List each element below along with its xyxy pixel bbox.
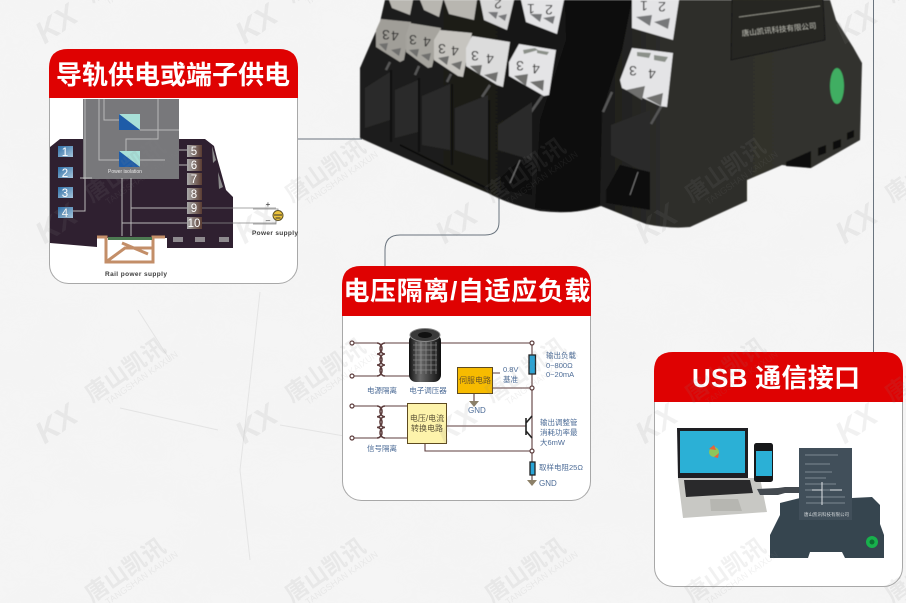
circuit labels: 输出调整管 [540, 417, 578, 427]
circuit labels: 基准 [503, 374, 518, 384]
circuit labels [367, 350, 583, 488]
lower terminal blocks 3/4: 3 [382, 27, 390, 43]
terminal numbers right: 7 [191, 174, 197, 186]
watermarks: 唐山凯讯 [480, 333, 570, 407]
servo box [458, 368, 492, 394]
transistor [526, 416, 532, 438]
lower terminal blocks 3/4: 3 [629, 63, 637, 79]
resistors [529, 355, 536, 374]
terminal numbers right: 9 [191, 203, 197, 215]
terminal numbers left [58, 146, 73, 220]
terminal numbers left: 1 [62, 147, 68, 159]
watermarks: KX [629, 196, 686, 251]
lower terminal blocks 3/4 [376, 19, 673, 107]
laptop [677, 428, 767, 518]
panel: USB interface [654, 352, 903, 586]
watermarks: KX [429, 396, 486, 451]
lower terminal blocks 3/4: 3 [471, 48, 479, 64]
terminal numbers left: 3 [62, 188, 68, 200]
watermarks: 唐山凯讯 [280, 133, 370, 207]
watermarks: KX [429, 196, 486, 251]
heading: USB 通信接口 [692, 363, 860, 393]
front sockets [365, 72, 650, 175]
circuit labels: 大6mW [540, 437, 566, 447]
polarity marks: + [266, 200, 271, 209]
terminal numbers right: 6 [191, 160, 197, 172]
watermarks: 唐山凯讯 [280, 333, 370, 407]
product photo: isolators [360, 0, 862, 228]
black gap between devices [535, 0, 632, 212]
watermarks: KX [829, 396, 886, 451]
terminal numbers right: 10 [188, 218, 200, 230]
lower terminal blocks 3/4: 3 [438, 41, 446, 57]
panel: rail or terminal power [49, 49, 298, 284]
connector lines [298, 0, 874, 352]
circuit labels: 电源隔离 [367, 385, 397, 395]
watermarks: TANGSHAN KAIXUN [304, 349, 380, 407]
watermarks: 唐山凯讯 [680, 333, 770, 407]
watermarks: 唐山凯讯 [80, 133, 170, 207]
ground symbol [273, 210, 283, 220]
lower terminal blocks 3/4: 3 [516, 58, 524, 74]
ground symbols [469, 401, 537, 486]
DIN rail [97, 237, 165, 262]
isolator module [770, 448, 884, 558]
circuit diagram: 电压/电流 [410, 413, 444, 423]
isolation box [83, 99, 179, 179]
watermarks: TANGSHAN KAIXUN [104, 349, 180, 407]
plate text: 唐山凯讯科技有限公司 [741, 20, 817, 38]
upper terminal blocks 1/2: 2 [545, 2, 553, 18]
rail slots [786, 130, 854, 168]
wiring diagram [50, 99, 298, 278]
device group silhouette [360, 0, 862, 228]
green status dot [830, 68, 844, 104]
watermarks: KX [829, 196, 886, 251]
circuit diagram [350, 328, 583, 488]
transformer coils [377, 343, 385, 438]
heading: 导轨供电或端子供电 [56, 60, 290, 90]
module maker text: 唐山凯讯科技有限公司 [804, 511, 849, 518]
terminal numbers right: 5 [191, 146, 197, 158]
circuit labels: 输出负载 [546, 350, 576, 360]
terminal numbers right: 8 [191, 189, 197, 201]
circuit labels: 消耗功率最 [540, 427, 578, 437]
circuit diagram: 转换电路 [411, 423, 443, 433]
watermarks: KX [629, 396, 686, 451]
rail power label: Rail power supply [105, 271, 167, 278]
watermarks: TANGSHAN KAIXUN [504, 149, 580, 207]
circuit labels: GND [468, 406, 486, 415]
terminal numbers left: 4 [62, 208, 69, 220]
power supply label: Power supply [252, 230, 298, 237]
diagram caption: Power isolation [108, 169, 142, 175]
watermarks: TANGSHAN KAIXUN [704, 349, 780, 407]
watermarks: KX [29, 396, 86, 451]
circuit labels: GND [539, 479, 557, 488]
heading: 电压隔离/自适应负载 [344, 276, 590, 306]
header [654, 352, 903, 402]
header [342, 266, 591, 316]
module body [50, 139, 233, 248]
terminal numbers right [187, 145, 202, 230]
lower terminal blocks 3/4: 4 [423, 34, 431, 50]
watermarks: 唐山凯讯 [680, 133, 770, 207]
header [49, 49, 298, 98]
circuit labels: 0~800Ω [546, 361, 573, 370]
lower terminal blocks 3/4: 4 [532, 61, 540, 77]
lower terminal blocks 3/4: 3 [409, 32, 417, 48]
module separators [391, 70, 490, 193]
circuit labels: 电子调压器 [409, 385, 447, 395]
watermarks: TANGSHAN KAIXUN [704, 149, 780, 207]
watermarks: 唐山凯讯 [80, 333, 170, 407]
isolation symbols [119, 114, 140, 130]
circuit labels: 0.8V [503, 365, 518, 374]
terminals [350, 341, 534, 453]
power supply wires [202, 208, 278, 224]
watermarks: KX [229, 196, 286, 251]
lower terminal blocks 3/4: 4 [648, 66, 656, 82]
wiring diagram: – [266, 216, 271, 225]
terminal numbers left: 2 [62, 168, 68, 180]
lower terminal blocks 3/4: 4 [486, 51, 494, 67]
conversion box [408, 404, 446, 444]
panel: voltage isolation [342, 266, 591, 500]
voltage regulator cylinder [409, 334, 441, 382]
upper terminal blocks 1/2 [389, 0, 679, 40]
smartphone [754, 443, 773, 482]
watermarks: TANGSHAN KAIXUN [304, 149, 380, 207]
circuit labels: 取样电阻25Ω [539, 462, 583, 472]
watermarks: TANGSHAN KAIXUN [504, 349, 580, 407]
watermarks: KX [229, 396, 286, 451]
circuit diagram: 伺服电路 [459, 375, 491, 385]
watermarks: 唐山凯讯 [480, 133, 570, 207]
watermarks: KX [29, 196, 86, 251]
USB cable [757, 487, 800, 495]
label plate [731, 0, 825, 60]
watermarks: TANGSHAN KAIXUN [104, 149, 180, 207]
circuit labels: 信号隔离 [367, 443, 397, 453]
circuit labels: 0~20mA [546, 370, 574, 379]
lower terminal blocks 3/4: 4 [451, 43, 459, 59]
lower terminal blocks 3/4: 4 [391, 28, 399, 44]
upper terminal blocks 1/2: 1 [527, 1, 535, 17]
wires [352, 343, 532, 483]
side clips and slots [212, 146, 223, 189]
